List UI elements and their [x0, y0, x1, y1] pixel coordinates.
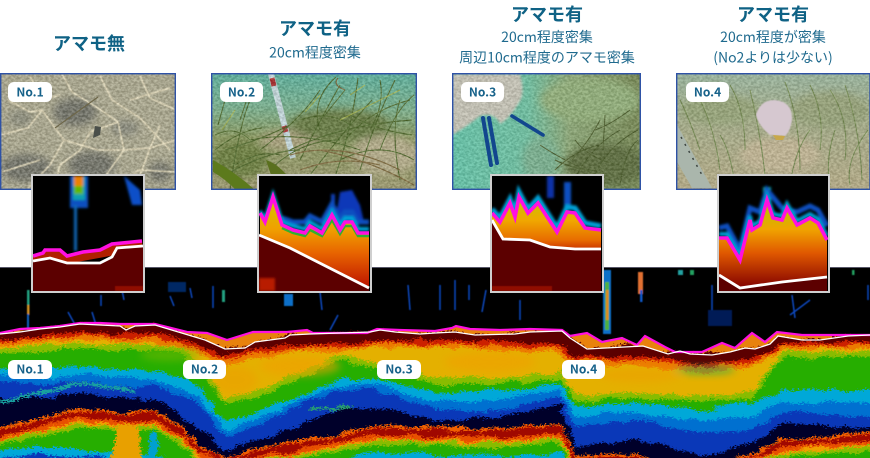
- photo 1: sandy seabed: [0, 73, 176, 190]
- label No.2 echogram: [183, 360, 226, 379]
- heading: eelgrass no.3: 20cm程度密集: [501, 27, 593, 47]
- inset 1: [31, 174, 145, 293]
- second echo: [0, 408, 870, 458]
- heading: eelgrass no.2: アマモ有: [279, 15, 351, 41]
- label No.1 photo: [8, 82, 52, 102]
- heading: eelgrass no.2: 20cm程度密集: [269, 42, 361, 62]
- inset 4: [717, 174, 830, 293]
- label No.2 photo: [220, 82, 263, 102]
- label No.4 photo: No.4: [694, 84, 721, 100]
- heading: eelgrass no.4: アマモ有: [737, 1, 809, 27]
- label No.4 photo: [686, 82, 729, 102]
- heading: eelgrass no.3: 周辺10cm程度のアマモ密集: [459, 48, 635, 68]
- ruler: [676, 123, 712, 188]
- plume under echo: [112, 424, 142, 458]
- label No.4 echogram: [562, 360, 605, 379]
- jellyfish: [756, 100, 792, 140]
- seabed layers: [0, 324, 870, 458]
- label No.1 photo: No.1: [16, 84, 44, 100]
- label No.1 echogram: [8, 360, 52, 379]
- inset 2: [257, 174, 372, 293]
- heading: eelgrass no.2: [269, 15, 361, 62]
- label No.3 photo: [461, 82, 504, 102]
- magenta surface line: [0, 323, 870, 352]
- echo stray marks in water column: [27, 270, 868, 334]
- yellow-orange deep patches: [140, 349, 735, 394]
- label No.3 photo: No.3: [469, 84, 496, 100]
- white bottom line: [0, 324, 870, 355]
- heading: eelgrass no.4: (No2よりは少ない): [713, 48, 833, 68]
- blue tools: [483, 116, 543, 165]
- heading: eelgrass no.3: [459, 1, 635, 68]
- label No.3 echogram: [377, 360, 421, 379]
- inset 3: [490, 174, 604, 293]
- first multiple ripple band: [0, 384, 135, 402]
- surface vegetation patches: [0, 323, 870, 370]
- heading: eelgrass no.3: アマモ有: [511, 1, 583, 27]
- photo 4: jellyfish above eelgrass: [676, 73, 870, 190]
- label No.2 photo: No.2: [228, 84, 255, 100]
- label No.2 echogram: No.2: [191, 360, 218, 378]
- echogram main panel: [0, 267, 870, 458]
- heading: eelgrass no.4: [713, 1, 833, 68]
- label No.3 echogram: No.3: [385, 360, 413, 378]
- photo 2: dense eelgrass: [211, 73, 417, 190]
- ruler: [271, 74, 293, 158]
- heading: eelgrass no.4: 20cm程度が密集: [720, 27, 826, 47]
- heading: no eelgrass: アマモ無: [53, 30, 125, 56]
- label No.1 echogram: No.1: [16, 360, 44, 378]
- photo 3: hand with tools and eelgrass: [452, 73, 641, 190]
- label No.4 echogram: No.4: [570, 360, 597, 378]
